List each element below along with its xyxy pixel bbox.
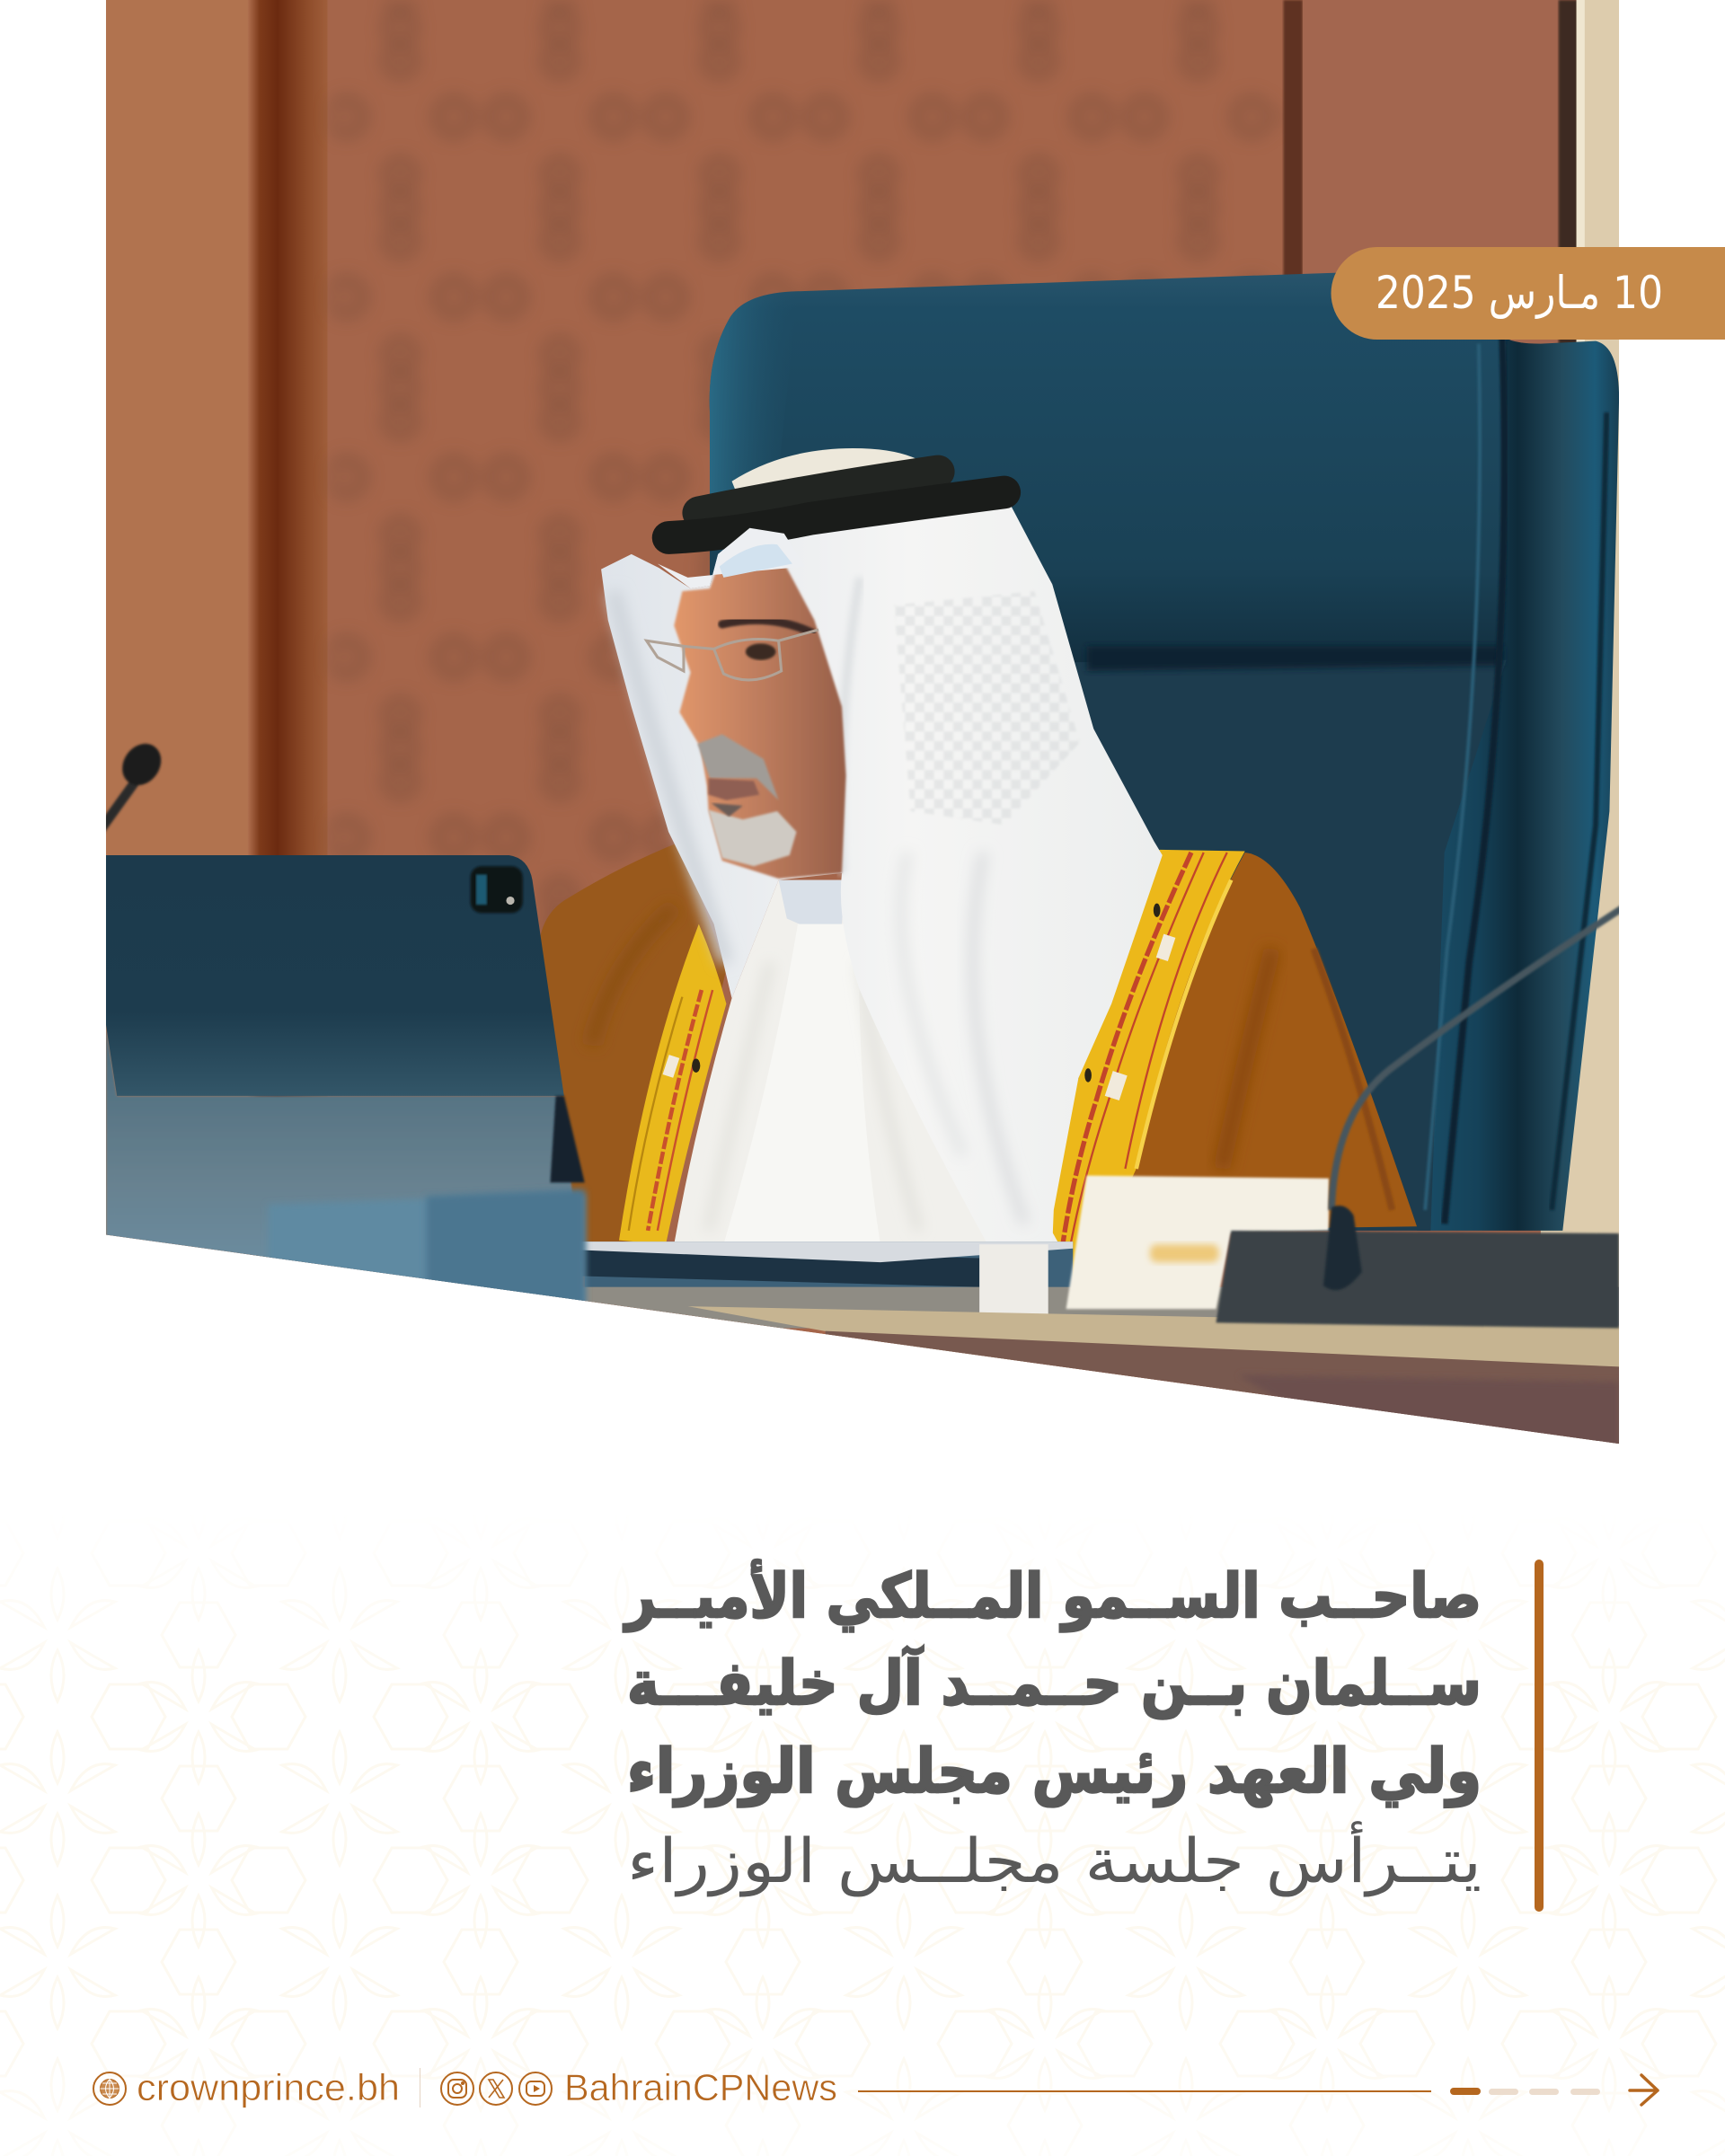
icon: X bbox=[480, 2072, 512, 2105]
title: headline bbox=[623, 1559, 1482, 1897]
heading line 2: ســلمان بــن حــمــد آل خليفـــة bbox=[627, 1645, 1482, 1719]
gold trim right bbox=[1053, 850, 1245, 1271]
microphone left bbox=[99, 737, 169, 832]
gold trim left bbox=[619, 924, 726, 1244]
man: face with beard and glasses bbox=[647, 550, 846, 879]
arrow: next page bbox=[1630, 2075, 1658, 2105]
heading line 3: ولي العهد رئيس مجلس الوزراء bbox=[627, 1736, 1482, 1807]
date text: 10 مـارس 2025 bbox=[1376, 267, 1663, 319]
photo: crown prince at cabinet session bbox=[99, 0, 1623, 1457]
man: white cap and black agal bbox=[658, 448, 1004, 588]
eyebrow bbox=[722, 620, 811, 632]
man: white ghutra headdress bbox=[601, 506, 1163, 1244]
glasses bbox=[647, 630, 818, 680]
tablet on stand bbox=[106, 855, 586, 1320]
photo wall panels bbox=[106, 0, 1619, 1457]
accent bar: heading rule bbox=[1535, 1560, 1544, 1912]
page indicator bbox=[1450, 2088, 1600, 2095]
chair: blue leather back bbox=[710, 270, 1619, 1231]
footer bar bbox=[93, 2066, 1658, 2108]
beard bbox=[709, 810, 797, 866]
date badge bbox=[1331, 247, 1725, 340]
man: brown bisht and gold trim bbox=[539, 842, 1417, 1320]
eye bbox=[746, 643, 776, 660]
dark microphone base bbox=[1216, 1231, 1619, 1329]
icon: globe bbox=[93, 2072, 126, 2105]
subheading: يتــرأس جلسة مجلــس الوزراء bbox=[627, 1821, 1482, 1897]
icon: youtube bbox=[519, 2072, 552, 2105]
website text: crownprince.bh bbox=[137, 2066, 400, 2108]
heading line 1: صاحــب الســمو المــلكي الأميــر bbox=[623, 1559, 1482, 1632]
icon: instagram bbox=[441, 2072, 473, 2105]
background pattern: geometric flowers bbox=[0, 1608, 1725, 2116]
footer rule bbox=[858, 2090, 1431, 2092]
social handle text: BahrainCPNews bbox=[564, 2066, 837, 2108]
man: white thobe bbox=[674, 880, 1059, 1258]
microphone right bbox=[1323, 907, 1623, 1290]
name card bbox=[1066, 1176, 1329, 1309]
table surface bbox=[550, 1241, 1619, 1457]
lips bbox=[709, 778, 759, 800]
moustache bbox=[697, 734, 779, 800]
